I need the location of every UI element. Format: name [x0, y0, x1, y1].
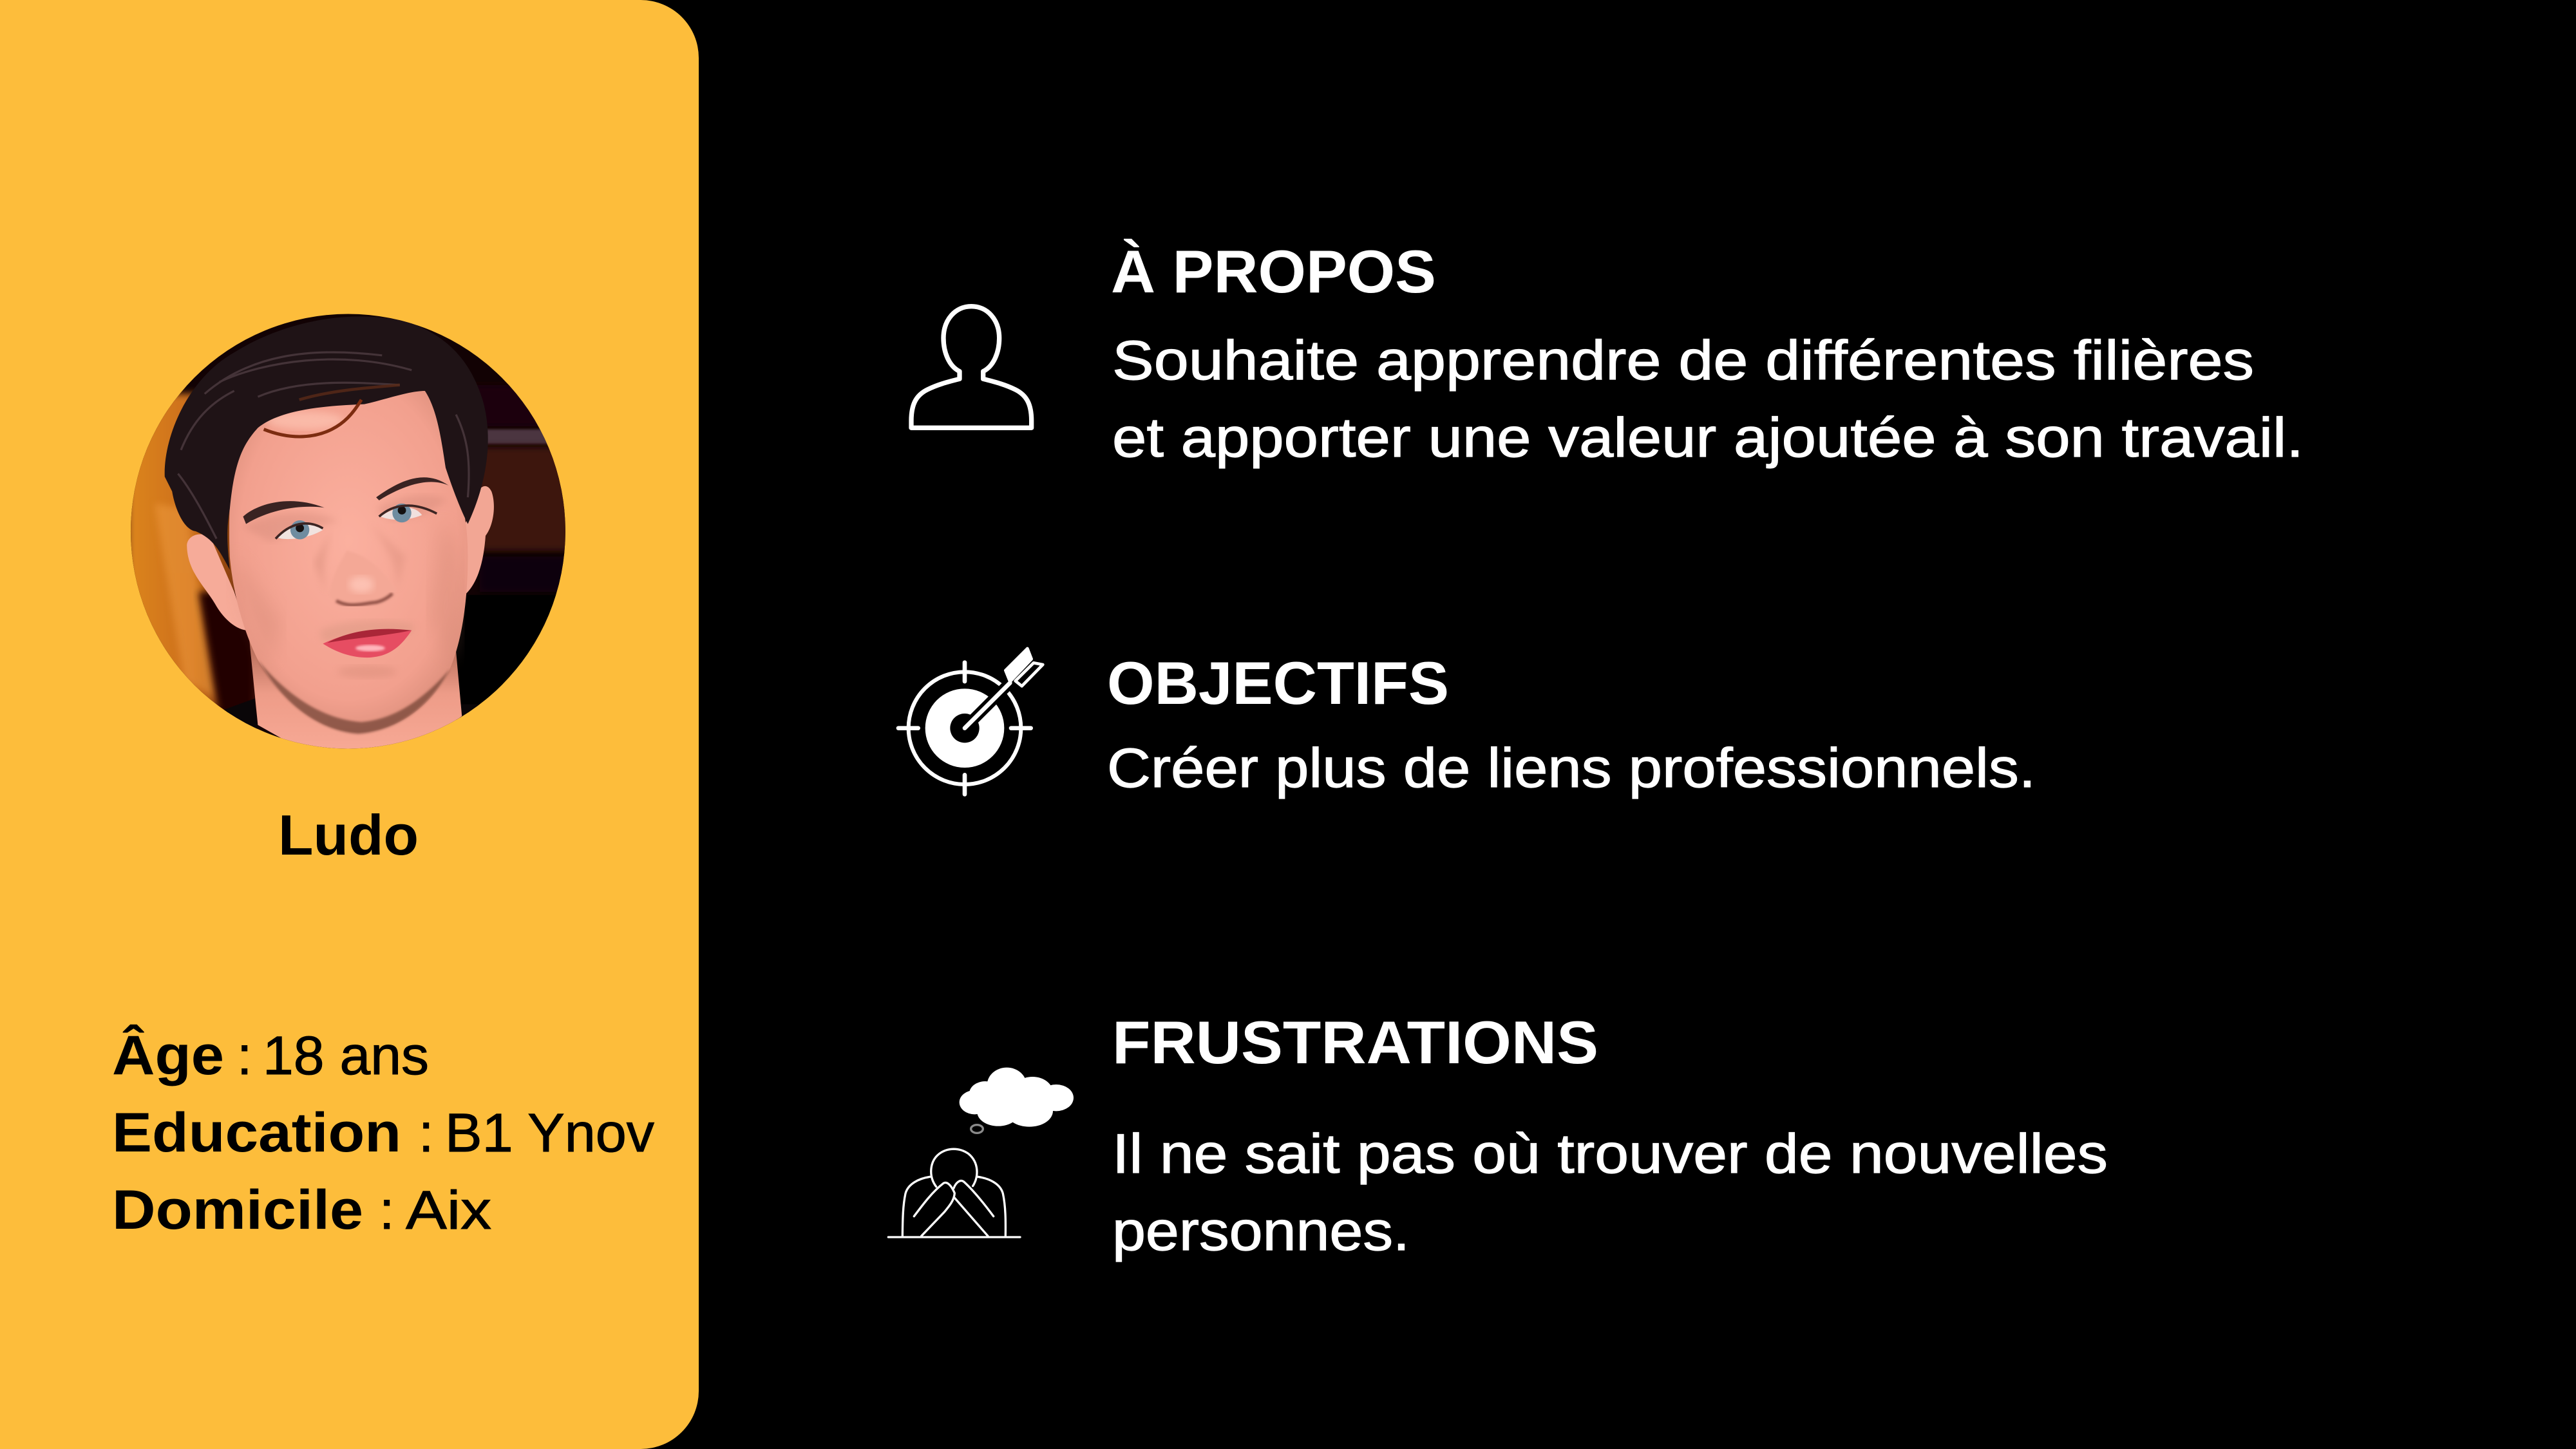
section: objectifs — [1107, 649, 2036, 799]
text: frustrations — [1112, 1123, 2108, 1262]
left eyebrow — [243, 501, 325, 524]
portrait photo — [130, 314, 565, 748]
left eye — [276, 520, 323, 539]
section: a propos — [1111, 238, 2304, 469]
heading: frustrations: FRUSTRATIONS — [1112, 1009, 1598, 1076]
home line: : — [379, 1180, 394, 1240]
section: frustrations — [1112, 1009, 2108, 1262]
text: a propos: Souhaite apprendre de différentes filières — [1112, 330, 2254, 392]
home line — [112, 1179, 491, 1241]
education line: B1 Ynov — [445, 1103, 654, 1163]
cloud — [960, 1068, 1074, 1127]
education line — [112, 1102, 654, 1164]
text: a propos — [1112, 330, 2304, 469]
text: objectifs: Créer plus de liens professionnels. — [1107, 737, 2036, 799]
icon: person outline — [911, 307, 1032, 428]
education line: Education — [112, 1102, 401, 1164]
age line: : — [237, 1025, 252, 1086]
home line: Domicile — [112, 1179, 363, 1241]
name: Ludo — [278, 803, 419, 867]
neck — [249, 636, 462, 752]
left ear — [187, 535, 247, 630]
age line — [112, 1025, 429, 1086]
icon: target with arrow — [898, 649, 1043, 794]
right ear — [466, 486, 494, 594]
education line: : — [419, 1103, 433, 1163]
text: a propos: et apporter une valeur ajoutée à son travail. — [1112, 407, 2304, 469]
heading: a propos: À PROPOS — [1111, 238, 1436, 305]
right eyebrow — [376, 477, 449, 500]
hair — [165, 316, 488, 570]
shirt — [224, 698, 480, 729]
face shading — [434, 544, 465, 657]
icon: frustrated person with thought cloud — [888, 1068, 1074, 1237]
panel: yellow profile card — [0, 0, 699, 1449]
age line: Âge — [112, 1025, 224, 1086]
home line: Aix — [406, 1180, 491, 1240]
text: frustrations: Il ne sait pas où trouver de nouvelles — [1112, 1123, 2108, 1185]
right eye — [379, 504, 437, 522]
face — [229, 384, 468, 732]
age line: 18 ans — [263, 1025, 429, 1086]
text: frustrations: personnes. — [1112, 1200, 1410, 1262]
lips — [323, 629, 412, 658]
nose — [330, 551, 395, 604]
heading: objectifs: OBJECTIFS — [1107, 649, 1449, 717]
